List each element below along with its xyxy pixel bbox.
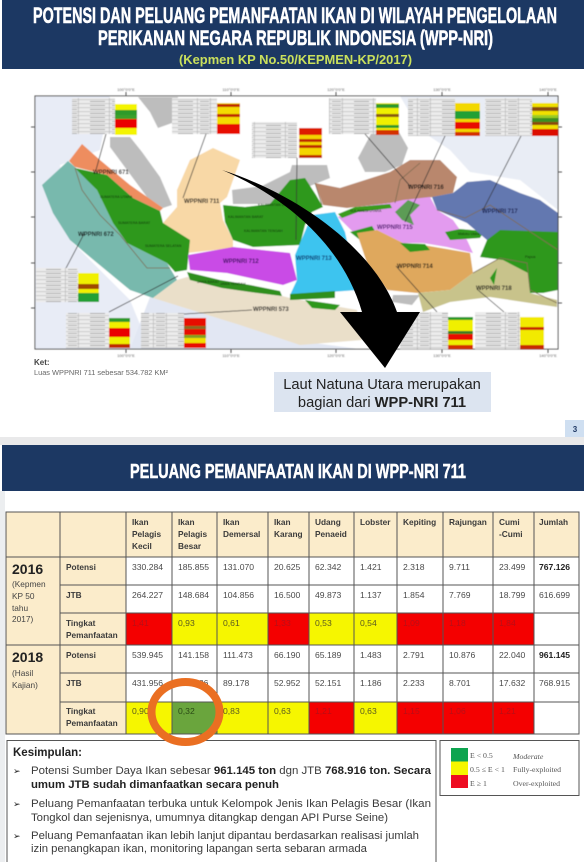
province labels: Papua: [525, 255, 535, 259]
region labels: WPPNRI 573: [253, 307, 289, 313]
bullet text: Peluang Pemanfaatan terbuka untuk Kelompok Jenis Ikan Pelagis Besar (Ikan: [31, 798, 431, 810]
bullet text: umum JTB sudah dimanfaatkan secara penuh: [31, 779, 279, 791]
region labels: WPPNRI 711: [184, 199, 220, 205]
legend: Fully-exploited: [513, 765, 561, 774]
row labels: JTB: [66, 678, 82, 688]
mini table 4: [329, 98, 399, 135]
values: 20.625: [274, 562, 301, 572]
values: 0,54: [360, 618, 377, 628]
values: 1.483: [360, 650, 382, 660]
row labels: Pemanfaatan: [66, 630, 118, 640]
province labels: Maluku Utara: [458, 232, 479, 236]
values: 66.190: [274, 650, 301, 660]
mini table 10: [400, 312, 473, 349]
map note: Ket:: [34, 358, 50, 367]
values: 1,21: [499, 706, 516, 716]
values: 111.473: [223, 650, 253, 660]
column headers: Rajungan: [449, 517, 487, 527]
values: 89.178: [223, 678, 250, 688]
values: 2.233: [403, 678, 425, 688]
region: WPP 711: [163, 148, 240, 253]
region labels: [78, 170, 518, 313]
mini table 3: [252, 122, 322, 158]
values: 0,63: [360, 706, 377, 716]
row labels: Tingkat: [66, 618, 96, 628]
values: 1,09: [403, 618, 420, 628]
column headers: -Cumi: [499, 529, 523, 539]
values: 0,83: [223, 706, 240, 716]
column headers: Ikan: [178, 517, 195, 527]
year labels: (Kepmen: [12, 579, 46, 589]
values: 131.070: [223, 562, 254, 572]
map frame with ticks: 140°0'0"E: [539, 353, 557, 358]
callout: Laut Natuna Utara: [274, 372, 491, 412]
values: 1,21: [315, 706, 332, 716]
land: Sumatra: [75, 168, 190, 272]
bullet markers: ➢: [13, 767, 21, 777]
region: WPP 717: [432, 180, 558, 240]
values: 23.499: [499, 562, 526, 572]
year labels: 2017): [12, 614, 33, 624]
values: 141.158: [178, 650, 209, 660]
mini table 11: [475, 312, 544, 349]
values: 1,41: [132, 618, 149, 628]
arrow: big black curved arrow to WPP 711: [222, 170, 420, 368]
mini table 1: [72, 98, 137, 135]
values: 1,15: [403, 706, 420, 716]
values: 1.854: [403, 590, 425, 600]
map frame with ticks: 100°0'0"E: [117, 353, 135, 358]
column headers: Karang: [274, 529, 303, 539]
map note: Luas WPPNRI 711 sebesar 534.782 KM²: [34, 368, 168, 377]
legend: [440, 740, 579, 796]
column headers: Cumi: [499, 517, 520, 527]
callout: Laut Natuna Utara: bagian dari WPP-NRI 711: [298, 395, 466, 411]
year labels: 2016: [12, 561, 43, 577]
boundary lines: [75, 163, 558, 303]
values: 0,53: [315, 618, 332, 628]
map frame with ticks: 140°0'0"E: [539, 87, 557, 92]
column headers: [132, 517, 568, 551]
region labels: WPPNRI 671: [93, 170, 129, 176]
year labels: Kajian): [12, 680, 38, 690]
values: 264.227: [132, 590, 163, 600]
land: Java: [187, 272, 282, 296]
mini table 6: [485, 98, 558, 136]
mini table 9: [141, 313, 206, 348]
map frame with ticks: 100°0'0"E: [117, 87, 135, 92]
values: 0,61: [223, 618, 240, 628]
mini table 5: [408, 98, 480, 136]
region: WPP 715: [338, 197, 473, 253]
header banner: map section: [2, 0, 584, 69]
bullet markers: ➢: [13, 832, 21, 842]
values: 1.137: [360, 590, 382, 600]
legend: E ≥ 1: [470, 779, 487, 788]
region: WPP 712: [188, 247, 297, 285]
region labels: WPPNRI 716: [408, 185, 444, 191]
region labels: WPPNRI 717: [482, 209, 518, 215]
values: 0,90: [132, 706, 149, 716]
title: [33, 3, 557, 50]
legend: Over-exploited: [513, 779, 560, 788]
row labels: Tingkat: [66, 706, 96, 716]
region labels: WPPNRI 718: [476, 286, 512, 292]
values: 1,84: [499, 618, 516, 628]
values: 148.684: [178, 590, 209, 600]
values: 52.952: [274, 678, 301, 688]
utilisation cells 2018: [126, 702, 534, 734]
values: [132, 562, 570, 716]
highlight oval around 0,32: [152, 682, 220, 742]
column headers: Lobster: [360, 517, 391, 527]
values: 1.186: [360, 678, 382, 688]
bullet markers: ➢: [13, 800, 21, 810]
map frame with ticks: [31, 87, 562, 358]
utilisation cells 2016: [126, 613, 534, 645]
header banner: table section: [2, 445, 584, 491]
province labels: KALIMANTAN UTARA: [258, 203, 294, 207]
header banner: table section: PELUANG PEMANFAATAN IKAN DI WPP-NRI 711: [130, 461, 466, 483]
values: 62.342: [315, 562, 342, 572]
year labels: tahu: [12, 603, 29, 613]
year labels: 2018: [12, 649, 43, 665]
map of WPP-NRI fisheries management areas: [31, 87, 562, 358]
land: Sulawesi and Maluku: [338, 204, 392, 218]
province labels: SUMATERA SELATAN: [145, 244, 182, 248]
region labels: WPPNRI 714: [397, 264, 433, 270]
region: WPP 713: [290, 212, 358, 295]
region: WPP 718: [418, 258, 557, 312]
mini table 2: [172, 98, 240, 134]
values: 767.126: [539, 562, 570, 572]
row labels: JTB: [66, 590, 82, 600]
column headers: Pelagis: [132, 529, 161, 539]
values: 185.855: [178, 562, 209, 572]
page number: 3: [573, 425, 578, 434]
conclusion heading: Kesimpulan:: [13, 747, 82, 759]
map note: [34, 358, 168, 377]
column headers: Udang: [315, 517, 341, 527]
values: 1.421: [360, 562, 382, 572]
mini table 7: [36, 268, 99, 302]
values: 961.145: [539, 650, 570, 660]
map frame with ticks: 110°0'0"E: [222, 353, 240, 358]
region: WPP 714: [357, 230, 473, 293]
values: 2.791: [403, 650, 425, 660]
values: 112.926: [178, 678, 209, 688]
land: Malay peninsula and Borneo north: [110, 97, 420, 305]
column headers: Ikan: [274, 517, 291, 527]
values: 1,06: [449, 706, 466, 716]
values: 22.040: [499, 650, 526, 660]
map frame with ticks: 110°0'0"E: [222, 87, 240, 92]
column headers: Besar: [178, 541, 202, 551]
legend: E < 0.5: [470, 751, 493, 760]
values: 9.711: [449, 562, 470, 572]
mini table 8: [66, 313, 130, 348]
bullet text: Peluang Pemanfaatan ikan lebih lanjut dipantau berdasarkan realisasi jumlah: [31, 830, 419, 842]
province labels: SUMATERA UTARA: [100, 195, 133, 199]
data table: [6, 512, 579, 734]
region labels: WPPNRI 713: [296, 256, 332, 262]
bullet text: izin penangkapan ikan, monitoring lapangan serta sebaran armada: [31, 843, 368, 855]
bullet text: Tongkol dan sejenisnya, umumnya ditangkap dengan API Purse Seine): [31, 812, 388, 824]
values: 330.284: [132, 562, 163, 572]
province labels: JAWA TENGAH: [220, 282, 246, 286]
region: WPP 716: [315, 160, 457, 208]
map frame with ticks: 120°0'0"E: [327, 353, 345, 358]
province labels: SUMATERA BARAT: [118, 221, 151, 225]
year labels: (Hasil: [12, 668, 33, 678]
bullet markers: [13, 767, 21, 842]
values: 52.151: [315, 678, 342, 688]
region: WPP 572: [42, 161, 177, 298]
callout: Laut Natuna Utara: Laut Natuna Utara merupakan: [283, 377, 481, 393]
legend: 0.5 ≤ E < 1: [470, 765, 505, 774]
region: WPP 571: [69, 144, 163, 211]
legend: Moderate: [512, 752, 544, 761]
values: 431.956: [132, 678, 163, 688]
values: 17.632: [499, 678, 526, 688]
values: 16.500: [274, 590, 301, 600]
values: 10.876: [449, 650, 476, 660]
values: 1,18: [449, 618, 466, 628]
column headers: Kecil: [132, 541, 152, 551]
page number: [565, 420, 584, 437]
region: WPP 573: [153, 277, 362, 345]
conclusion panel: [7, 740, 436, 862]
column headers: Ikan: [223, 517, 240, 527]
year labels: [12, 561, 46, 690]
subtitle: (Kepmen KP No.50/KEPMEN-KP/2017): [179, 52, 412, 67]
column headers: Pelagis: [178, 529, 207, 539]
year labels: KP 50: [12, 591, 35, 601]
bullet text: Potensi Sumber Daya Ikan sebesar 961.145 ton dgn JTB 768.916 ton. Secara: [31, 765, 432, 777]
values: 616.699: [539, 590, 570, 600]
table background cells: [6, 512, 579, 734]
values: 539.945: [132, 650, 163, 660]
row labels: Pemanfaatan: [66, 718, 118, 728]
map frame with ticks: 130°0'0"E: [433, 87, 451, 92]
column headers: Ikan: [132, 517, 149, 527]
values: 18.799: [499, 590, 526, 600]
region labels: WPPNRI 672: [78, 232, 114, 238]
row labels: [66, 562, 118, 728]
row labels: Potensi: [66, 650, 96, 660]
region labels: WPPNRI 712: [223, 259, 259, 265]
column headers: Demersal: [223, 529, 260, 539]
column headers: Penaeid: [315, 529, 347, 539]
region labels: WPPNRI 715: [377, 225, 413, 231]
column headers: Kepiting: [403, 517, 436, 527]
values: 768.915: [539, 678, 570, 688]
land: Papua: [480, 230, 558, 293]
values: 65.189: [315, 650, 342, 660]
values: 0,93: [178, 618, 195, 628]
province labels: KALIMANTAN BARAT: [228, 215, 264, 219]
values: 0,63: [274, 706, 291, 716]
leader lines: [65, 134, 521, 314]
values: 104.856: [223, 590, 254, 600]
bullet text: [31, 765, 432, 855]
column headers: Jumlah: [539, 517, 568, 527]
row labels: Potensi: [66, 562, 96, 572]
map frame with ticks: 120°0'0"E: [327, 87, 345, 92]
land: Kalimantan: [223, 178, 323, 247]
province labels: SULAWESI UTARA: [350, 209, 382, 213]
values: 1,33: [274, 618, 291, 628]
province labels: [100, 195, 535, 286]
province labels: KALIMANTAN TENGAH: [244, 229, 283, 233]
province labels: JAWA BARAT: [197, 280, 220, 284]
values: 2.318: [403, 562, 425, 572]
values: 7.769: [449, 590, 471, 600]
values: 0,32: [178, 706, 195, 716]
map frame with ticks: 130°0'0"E: [433, 353, 451, 358]
values: 49.873: [315, 590, 342, 600]
values: 8.701: [449, 678, 471, 688]
